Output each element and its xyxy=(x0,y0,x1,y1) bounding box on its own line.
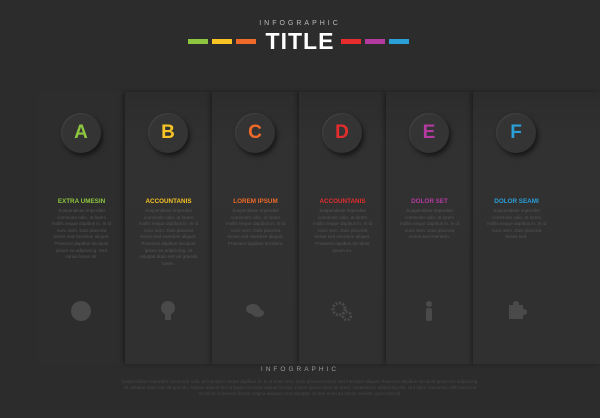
icon: person xyxy=(426,301,432,321)
circle D xyxy=(322,113,362,153)
circle C: C xyxy=(248,122,262,143)
circle A: A xyxy=(74,122,88,143)
heading F: DOLOR SEAMI xyxy=(494,198,539,205)
icon: bulb xyxy=(161,301,175,320)
text E: Suspendisse imperdiet commodo odio, at lorem mollis neque dapibus in. In id nunc sem. Duis placerat lectus sed interdum. xyxy=(400,208,459,239)
heading E: DOLOR SET xyxy=(411,198,448,205)
text F: Suspendisse imperdiet commodo odio, at lorem mollis neque dapibus in. In id nunc sem. Duis placerat lectus sed. xyxy=(487,208,546,239)
panel: C xyxy=(212,92,299,364)
circle F xyxy=(496,113,536,153)
footer xyxy=(122,366,478,396)
panel: A xyxy=(38,92,125,364)
text D: Suspendisse imperdiet commodo odio, at lorem mollis neque dapibus in. In id nunc sem. Duis placerat lectus sed interdum aliquet. Praesent dapibus tincidunt ipsum eu. xyxy=(313,208,372,253)
icon: puzzle xyxy=(509,301,527,319)
text A: Suspendisse imperdiet commodo odio, at lorem mollis neque dapibus in. In id nunc sem. Duis placerat lectus sed interdum aliquet. Praesent dapibus tincidunt ipsum eu adipiscing. Sed varius lorem sit. xyxy=(52,208,111,259)
circle B xyxy=(148,113,188,153)
circle E: E xyxy=(423,122,435,143)
panel: D xyxy=(299,92,386,364)
panel: F xyxy=(473,92,600,364)
heading C: LOREM IPSUM xyxy=(233,198,278,205)
panel: E xyxy=(386,92,473,364)
heading D: ACCOUNTANIS xyxy=(319,198,366,205)
title: TITLE xyxy=(266,28,334,54)
footer: INFOGRAPHIC xyxy=(261,366,339,373)
circle A xyxy=(61,113,101,153)
circle C xyxy=(235,113,275,153)
title xyxy=(188,20,409,54)
heading B: ACCOUNTANIS xyxy=(145,198,192,205)
circle B: B xyxy=(161,122,175,143)
text C: Suspendisse imperdiet commodo odio, at lorem mollis neque dapibus in. In id nunc sem. Duis placerat lectus sed interdum aliquet. Praesent dapibus tincidunt. xyxy=(226,208,285,246)
text B: Suspendisse imperdiet commodo odio, at lorem mollis neque dapibus in. In id nunc sem. Duis placerat lectus sed interdum aliquet. Praesent dapibus tincidunt ipsum eu adipiscing. Ut volutpat diam est vel gravida lorem. xyxy=(139,208,198,266)
circle D: D xyxy=(335,122,349,143)
panel: B xyxy=(125,92,212,364)
heading A: EXTRA UMESIN xyxy=(58,198,105,205)
icon: gears xyxy=(332,302,352,321)
icon: chat xyxy=(246,304,264,317)
circle E xyxy=(409,113,449,153)
footer: Suspendisse imperdiet commodo odio, at interdum neque dapibus in. In id nunc sem. Duis placerat lectus sed interdum aliquet. Praesent dapibus tincidunt ipsum eu adipiscing. Ut volutpat diam est vel gravida. Nullam aliquet dui ut ligula convallis aliquet lacinia. Lorem ipsum dolor sit amet, consectetur adipiscing elit, sed diam nonummy nibh euismod tincidunt ut laoreet dolore magna aliquam erat volutpat. Ut wisi enim ad minim veniam, quis nostrud. xyxy=(122,379,478,396)
title: INFOGRAPHIC xyxy=(259,20,341,27)
icon: globe xyxy=(71,301,91,321)
circle F: F xyxy=(510,122,522,143)
